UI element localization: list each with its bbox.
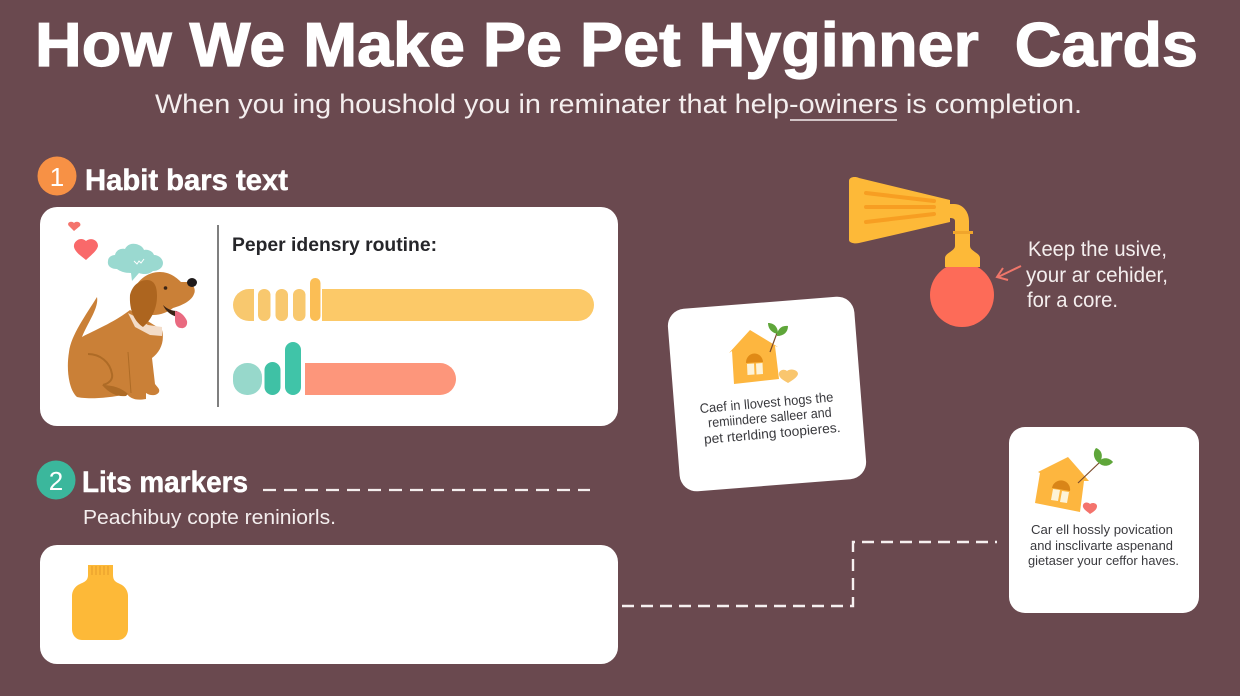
text: bulb note: for a core. bbox=[1027, 289, 1118, 312]
icon: tilted house bbox=[1035, 448, 1113, 514]
text: bulb note: Keep the usive, bbox=[1028, 238, 1167, 261]
icon: spray funnel and bulb bbox=[849, 177, 994, 327]
step 1 heading: 1 bbox=[50, 162, 64, 192]
step 2 heading bbox=[36, 460, 248, 500]
step 2 heading: 2 bbox=[49, 466, 63, 496]
text: right card body: Car ell hossly povication bbox=[1031, 522, 1173, 537]
arrow: dashed connector bbox=[622, 542, 997, 606]
text: tilted card body: remiindere salleer and bbox=[707, 405, 832, 430]
step 1 heading: Habit bars text bbox=[85, 164, 288, 197]
text: tilted card body: Caef in llovest hogs the bbox=[699, 389, 834, 416]
text: step 2 description: Peachibuy copte reniniorls. bbox=[83, 507, 336, 529]
icon: dog bbox=[68, 222, 197, 400]
panel: tilted card bbox=[667, 295, 867, 493]
text: right card body bbox=[1028, 522, 1179, 568]
arrow: pointer to bulb bbox=[997, 266, 1021, 280]
text: tilted card body: pet rterlding toopieres. bbox=[703, 420, 841, 447]
icon: bottle bbox=[72, 565, 128, 640]
text: bulb note bbox=[1026, 238, 1168, 312]
step 1 heading bbox=[38, 156, 288, 197]
bar: teal and salmon habit bbox=[233, 342, 456, 395]
subtitle: When you ing houshold you in reminater that help-owiners is completion. bbox=[155, 89, 1082, 119]
panel: habit bars bbox=[40, 207, 618, 426]
title: How We Make Pe Pet Hyginner Cards bbox=[35, 11, 1198, 80]
text: routine label: Peper idensry routine: bbox=[232, 234, 437, 256]
bar: yellow habit bbox=[233, 278, 594, 321]
text: bulb note: your ar cehider, bbox=[1026, 264, 1168, 287]
panel: right card bbox=[1009, 427, 1199, 613]
text: right card body: gietaser your ceffor haves. bbox=[1028, 553, 1179, 568]
text: right card body: and insclivarte aspenand bbox=[1030, 538, 1173, 553]
step 2 heading: Lits markers bbox=[82, 466, 248, 499]
text: tilted card body bbox=[699, 389, 841, 447]
icon: house bbox=[729, 323, 798, 384]
panel: list markers bbox=[40, 545, 618, 664]
